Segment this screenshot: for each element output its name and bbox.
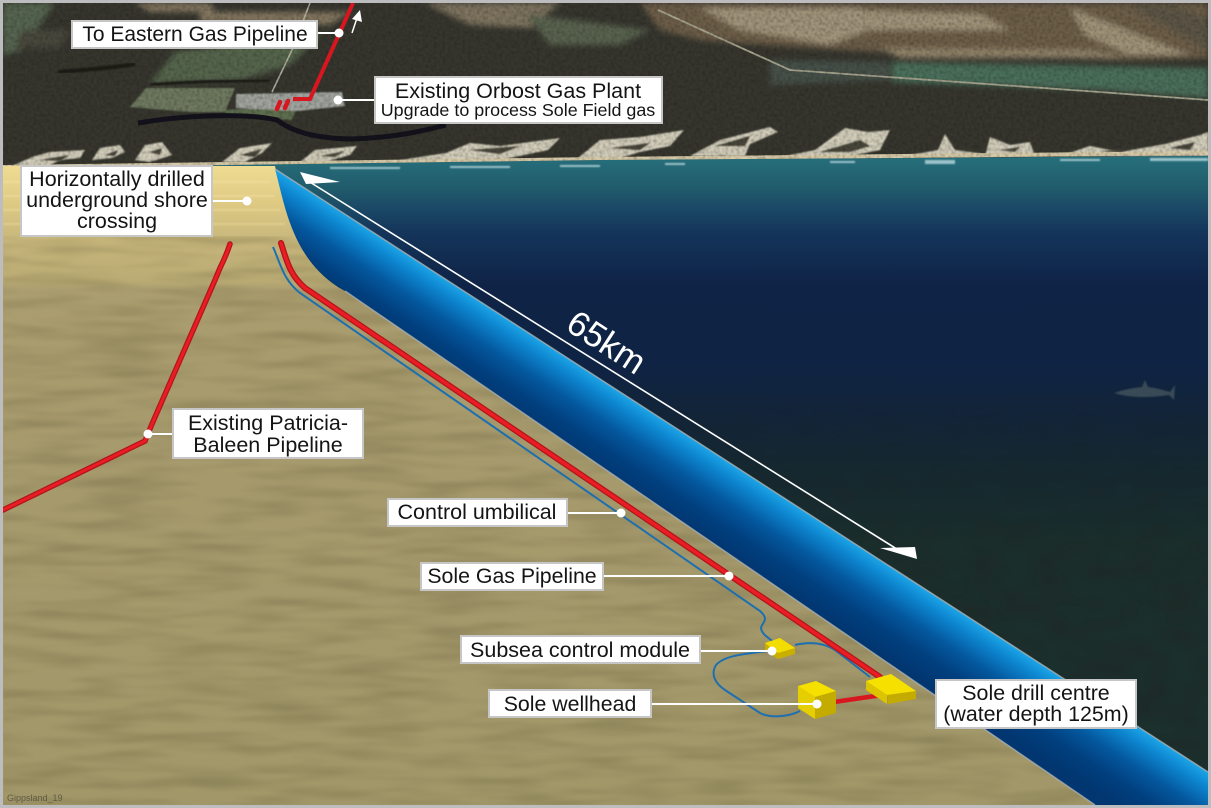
label: Horizontally drilled underground shore crossing: Horizontally drilled: [29, 167, 205, 191]
label: Sole wellhead: Sole wellhead: [504, 692, 636, 716]
label: Sole wellhead: [489, 690, 822, 717]
dunes along the beach: [12, 127, 1208, 168]
label: Sole drill centre: (water depth 125m): [943, 702, 1129, 726]
subsea control module: [765, 638, 795, 659]
label: Existing Orbost Gas Plant: Existing Orbost Gas Plant: [395, 79, 641, 103]
label: Existing Patricia-Baleen Pipeline: Existing Patricia-: [188, 411, 348, 435]
dark pockets in dunes: [40, 136, 1195, 161]
Sole wellhead cube: [798, 681, 836, 719]
label: Subsea control module: Subsea control module: [470, 638, 690, 662]
label: Sole Gas Pipeline: Sole Gas Pipeline: [427, 564, 597, 588]
arrow: toward Eastern Gas Pipeline: [352, 10, 362, 33]
label: Sole Gas Pipeline: [421, 563, 734, 590]
ocean surface: [213, 156, 1208, 772]
flowline from wellhead to drill centre: [834, 695, 882, 702]
label: Existing Patricia-Baleen Pipeline: Baleen Pipeline: [193, 433, 343, 457]
label: Horizontally drilled underground shore crossing: underground shore: [26, 188, 208, 212]
distance text: 65km: [560, 303, 653, 382]
label: Sole drill centre: [936, 680, 1136, 728]
label: Subsea control module: [461, 636, 776, 663]
label: Control umbilical: Control umbilical: [398, 500, 556, 524]
dimension arrow: 65km: [300, 172, 917, 559]
coastal land aerial photo: [3, 3, 1208, 168]
label: Horizontally drilled underground shore crossing: [21, 166, 252, 236]
credit text: Gippsland_19: [7, 793, 63, 803]
Patricia-Baleen pipeline: [3, 244, 230, 510]
label: Control umbilical: [388, 499, 626, 526]
river: [138, 116, 446, 139]
seabed with sand ripples: [3, 166, 1103, 805]
Sole gas pipeline: [281, 243, 880, 677]
label: Horizontally drilled underground shore crossing: crossing: [77, 209, 157, 233]
Orbost pipeline and tanks: [277, 3, 353, 109]
label: Existing Orbost Gas Plant: [334, 77, 662, 123]
road: [658, 10, 1208, 100]
label: To Eastern Gas Pipeline: To Eastern Gas Pipeline: [82, 23, 308, 46]
label: Sole drill centre: Sole drill centre: [962, 681, 1110, 705]
control umbilical cable: [273, 247, 870, 716]
slope edges: [275, 169, 1208, 805]
Sole drill centre block: [866, 674, 916, 704]
shark shadow in ocean: [1114, 380, 1175, 400]
label: Existing Patricia-Baleen Pipeline: [144, 409, 363, 458]
label: Existing Orbost Gas Plant: Upgrade to process Sole Field gas: [381, 100, 655, 120]
deep blue shelf slope band: [275, 169, 1208, 805]
